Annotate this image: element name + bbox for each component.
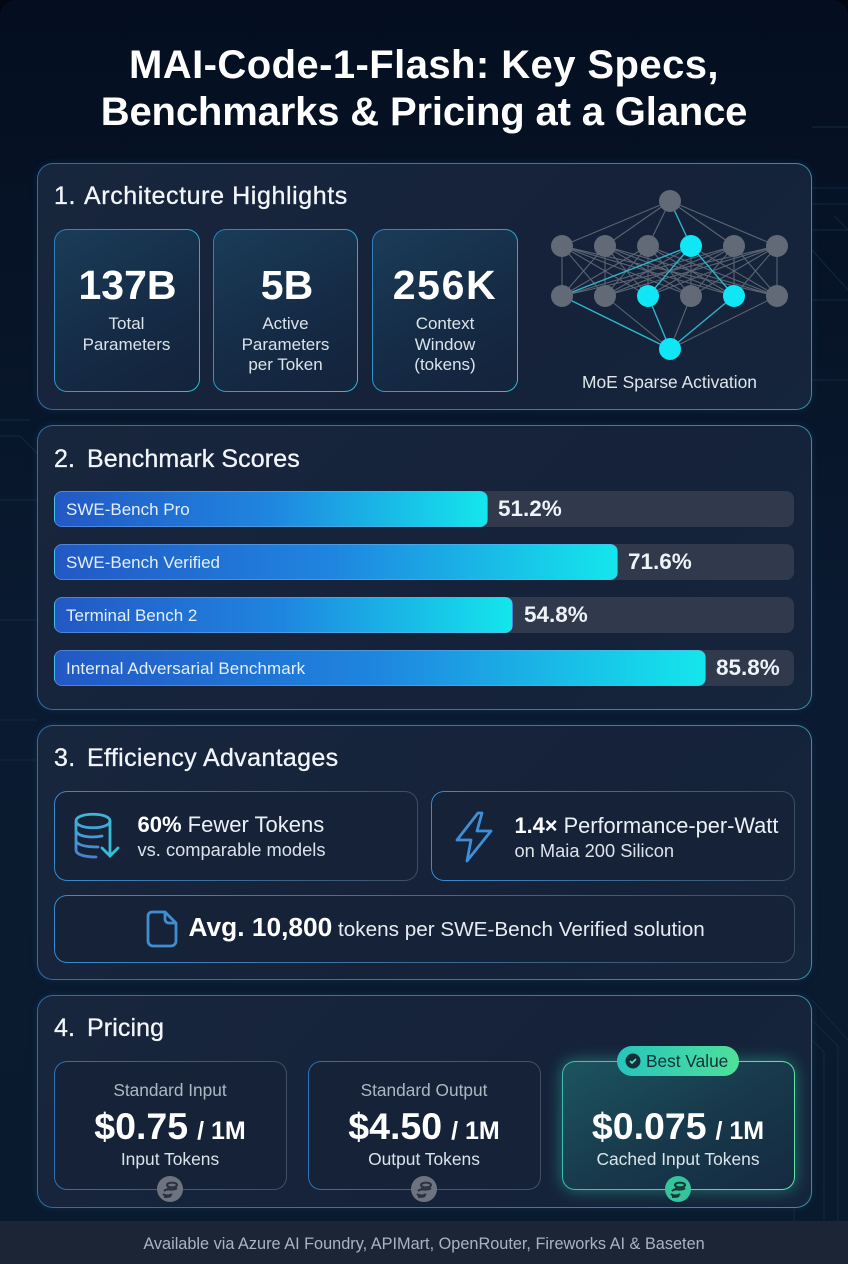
panel: architecture highlights	[37, 163, 812, 410]
footer: availability: Available via Azure AI Foundry, APIMart, OpenRouter, Fireworks AI & Baseten	[143, 1235, 705, 1253]
stat card: context window: 256K	[393, 262, 497, 308]
stat card: total parameters: Total	[109, 314, 144, 333]
price card: standard output: Output Tokens	[368, 1148, 480, 1168]
price card: standard output: Standard Output	[361, 1080, 487, 1100]
price card: cached input, best value: Cached Input Tokens	[596, 1148, 760, 1168]
price card: standard input: $0.75 / 1M	[94, 1104, 246, 1146]
title	[101, 43, 747, 134]
stat card: context window: (tokens)	[414, 355, 476, 374]
stat card: total parameters	[54, 229, 200, 392]
stat card: total parameters: Parameters	[83, 334, 170, 354]
price card: standard input	[54, 1060, 286, 1190]
diagram: MoE sparse activation network	[551, 190, 788, 392]
heading: efficiency advantages: 3.	[54, 744, 76, 772]
icon: coins, output	[411, 1176, 437, 1202]
stat card: active parameters per token	[213, 229, 358, 392]
panel: efficiency advantages	[37, 725, 812, 980]
badge: best value	[617, 1046, 739, 1076]
bar: SWE-Bench Pro 51.2%	[54, 491, 794, 527]
panel: benchmark scores	[37, 425, 812, 710]
card: 60% fewer tokens	[54, 790, 418, 880]
bar: Internal Adversarial Benchmark 85.8%	[54, 650, 794, 686]
card: 1.4x performance-per-watt	[430, 790, 794, 880]
diagram: MoE sparse activation network: MoE Sparse Activation	[582, 372, 757, 392]
title: Benchmarks & Pricing at a Glance	[101, 90, 747, 134]
stat card: context window: Window	[415, 334, 475, 354]
footer: availability	[0, 1221, 848, 1264]
panel: pricing	[37, 995, 812, 1208]
stat card: context window	[372, 229, 518, 392]
bar: SWE-Bench Pro 51.2%: 51.2%	[498, 496, 562, 521]
stat card: active parameters per token: per Token	[248, 355, 323, 374]
heading: pricing: 4.	[54, 1014, 75, 1042]
heading: benchmark scores: Benchmark Scores	[87, 445, 300, 473]
card: average tokens per solution	[54, 894, 794, 962]
heading: architecture highlights: Architecture Highlights	[84, 182, 348, 210]
icon: lightning bolt	[456, 812, 492, 862]
bar: SWE-Bench Pro 51.2%: SWE-Bench Pro	[66, 500, 190, 519]
card: 60% fewer tokens: vs. comparable models	[138, 838, 325, 860]
bar: Internal Adversarial Benchmark 85.8%: 85.8%	[716, 655, 780, 680]
bar: Internal Adversarial Benchmark 85.8%: Internal Adversarial Benchmark	[66, 659, 305, 678]
heading: efficiency advantages: Efficiency Advantages	[87, 744, 338, 772]
stat card: total parameters: 137B	[78, 262, 176, 308]
icon: database with down arrow	[74, 812, 120, 858]
icon: check badge	[626, 1054, 640, 1068]
bar: SWE-Bench Verified 71.6%	[54, 544, 794, 580]
price card: cached input, best value: $0.075 / 1M	[592, 1104, 764, 1146]
bar: Terminal Bench 2 54.8%: 54.8%	[524, 602, 588, 627]
price card: standard input: Standard Input	[113, 1080, 227, 1100]
bar: SWE-Bench Verified 71.6%: 71.6%	[628, 549, 692, 574]
price card: cached input, best value	[562, 1060, 794, 1190]
badge: best value: Best Value	[646, 1051, 728, 1071]
bar: Terminal Bench 2 54.8%	[54, 597, 794, 633]
heading: benchmark scores: 2.	[54, 445, 75, 473]
card: average tokens per solution: Avg. 10,800 tokens per SWE-Bench Verified solution	[188, 912, 705, 942]
card: 1.4x performance-per-watt: 1.4× Performance-per-Watt	[514, 812, 778, 838]
price card: standard output	[308, 1060, 540, 1190]
stat card: active parameters per token: Active	[262, 314, 309, 333]
heading: architecture highlights: 1.	[54, 182, 76, 210]
stat card: active parameters per token: Parameters	[242, 334, 329, 354]
card: 60% fewer tokens: 60% Fewer Tokens	[138, 812, 324, 836]
heading: pricing: Pricing	[87, 1014, 164, 1042]
stat card: active parameters per token: 5B	[261, 262, 313, 308]
bar: Terminal Bench 2 54.8%: Terminal Bench 2	[66, 606, 197, 625]
card: 1.4x performance-per-watt: on Maia 200 Silicon	[514, 840, 674, 860]
stat card: context window: Context	[416, 314, 474, 333]
price card: standard output: $4.50 / 1M	[348, 1104, 500, 1146]
icon: document	[146, 910, 178, 948]
bar: SWE-Bench Verified 71.6%: SWE-Bench Verified	[66, 553, 220, 572]
price card: standard input: Input Tokens	[121, 1148, 219, 1168]
icon: coins, input	[157, 1176, 183, 1202]
icon: coins, cached	[665, 1176, 691, 1202]
title: MAI-Code-1-Flash: Key Specs,	[129, 43, 719, 87]
